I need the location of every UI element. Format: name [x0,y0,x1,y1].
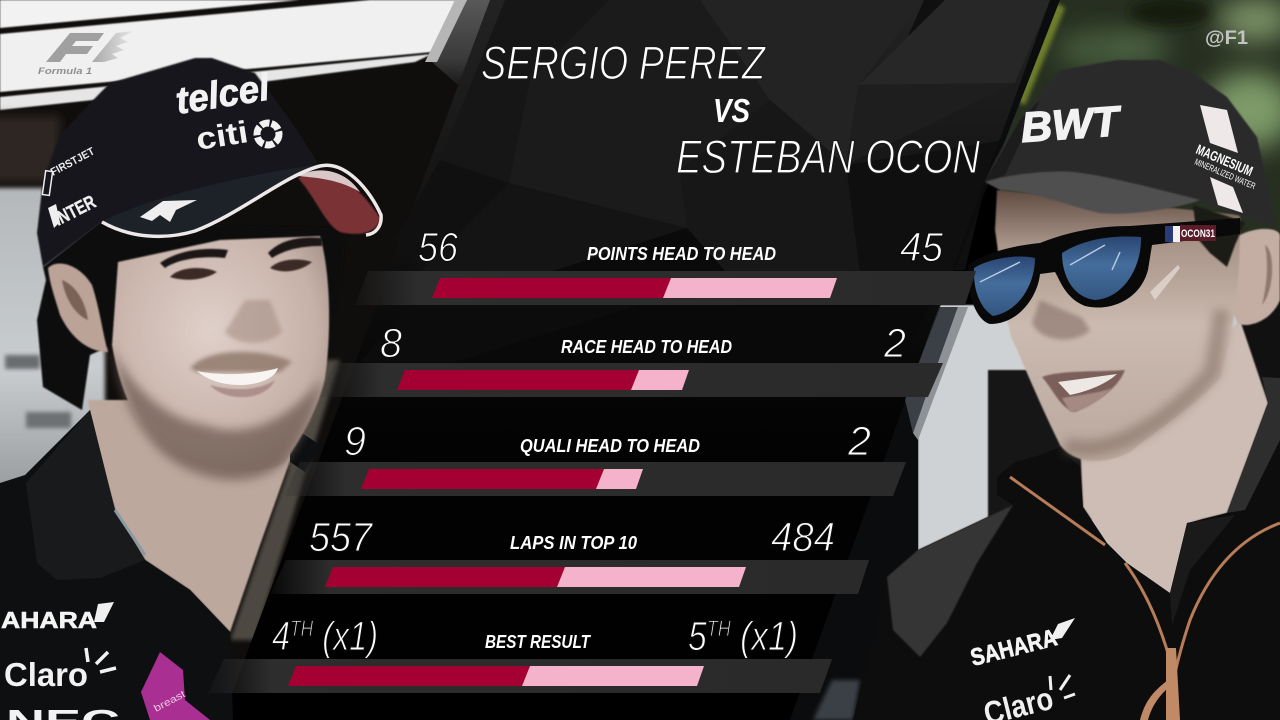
cap brim underside highlight [298,170,360,192]
stat: laps in top 10 [270,514,869,594]
arm flag: OCON31 [1181,228,1215,240]
panel: central dark low-poly parallelogram [222,0,1050,720]
lower translucent wedge [813,680,860,720]
title: Esteban Ocon: ESTEBAN OCON [676,130,980,183]
ribbon text: breast [152,689,188,715]
inner collar [1170,515,1235,625]
sponsor magnesium: MAGNESIUM [1194,141,1255,179]
collar piping [115,510,145,555]
bar perez [361,469,604,489]
icon: claro rays [86,648,116,672]
sponsor sahara wing [1050,618,1075,640]
icon: cap F1 mark [140,200,197,222]
zipper pull [1140,648,1180,720]
neck [1080,320,1268,593]
icon: firstjet box [42,171,53,195]
cap brim [985,171,1200,214]
bar perez [325,567,565,587]
value perez: 8 [380,320,402,366]
track [320,363,943,397]
right photo background [918,0,1280,720]
track [270,560,869,594]
ear [1228,229,1280,325]
label: RACE HEAD TO HEAD [561,337,732,357]
right lens [1062,236,1141,300]
eye right [270,260,312,271]
bar ocon [663,278,837,298]
cap stripe upper [1200,105,1238,153]
cap side shade [985,100,1040,182]
teeth [197,368,278,385]
value ocon: (x1) [731,613,798,659]
sponsor sahara: SAHARA [968,624,1060,672]
value ocon: TH [707,616,731,641]
left photo background [0,0,520,720]
cap crown [37,58,318,267]
value ocon: 45 [900,224,943,270]
bar ocon [557,567,746,587]
cap piping [102,165,381,236]
bar perez [288,666,530,686]
hair [37,222,345,410]
jacket shoulder patch [887,505,1013,657]
stat: race head to head [320,320,943,397]
sunglasses frame [968,218,1240,324]
right panel edge band [905,307,958,433]
value perez: 9 [344,418,366,464]
cheek mark [1150,265,1180,300]
neck [88,400,292,632]
label: BEST RESULT [485,632,592,652]
cap crown [985,60,1275,227]
jersey right shoulder [290,425,320,472]
bar perez [397,370,639,390]
jacket [853,377,1280,720]
title: vs: VS [713,92,750,129]
cap stripe lower [1210,177,1243,213]
title: Sergio Perez: SERGIO PEREZ [481,36,767,89]
track [208,659,832,693]
moustache [190,352,292,372]
pink ribbon badge [141,652,210,720]
lower lip [1062,388,1112,412]
value ocon: 484 [771,514,835,560]
value perez: 56 [418,224,458,270]
ear inner [1262,245,1272,305]
collar texture [1227,377,1280,513]
collar [26,410,145,580]
face [112,236,329,471]
track [355,271,976,305]
sponsor BWT: BWT [1019,97,1124,151]
left lens [974,256,1035,316]
right edge dark region [790,0,1060,720]
zipper left [1010,477,1170,660]
bar perez [432,278,671,298]
icon: inter mark [48,204,60,228]
photo: Esteban Ocon [853,60,1280,720]
sponsor telcel: telcel [173,66,274,123]
value ocon: 2 [883,320,906,366]
eye left [170,268,217,280]
right panel edge highlight [913,307,968,440]
sponsor sahara wing [94,602,114,622]
track [284,462,906,496]
label: QUALI HEAD TO HEAD [520,436,700,456]
photo: Sergio Perez [0,58,381,720]
label: LAPS IN TOP 10 [510,533,637,553]
lens reflections [980,245,1120,282]
stat: quali head to head [284,418,906,496]
zipper right [1172,523,1280,690]
face [995,190,1240,461]
jersey [0,410,233,720]
value perez: (x1) [313,613,378,659]
ear inner [62,280,88,320]
nose shadow [225,300,282,343]
logo text: Formula 1 [38,66,92,76]
credit: @F1: @F1 [1205,28,1248,49]
value perez: 557 [309,514,374,560]
hair side [1193,205,1245,267]
brow left [160,249,228,268]
bar ocon [631,370,689,390]
teeth [1058,374,1117,395]
sponsor citi: citi [194,114,250,157]
sponsor sahara: AHARA [1,607,97,633]
sponsor inter: INTER [51,192,100,230]
F1 logo [38,31,134,76]
value ocon: 5 [688,613,711,659]
bar ocon [596,469,643,489]
value perez: 4 [272,613,295,659]
lower lip [210,380,275,397]
cap brim underside [298,172,380,234]
beard [112,345,322,480]
mouth [1042,370,1125,412]
value ocon: 2 [847,418,871,464]
value perez: TH [290,616,313,641]
brow right [268,238,322,258]
nose shadow [1032,300,1090,340]
arm flag [1165,225,1216,242]
cap brim top [102,164,322,235]
icon: citi wheel [257,123,279,145]
label: POINTS HEAD TO HEAD [587,244,776,264]
bar ocon [522,666,704,686]
sponsor claro: Claro [4,656,88,693]
jaw stubble [1065,310,1222,448]
icon: claro rays [1050,675,1075,698]
sponsor firstjet: FIRSTJET [49,145,97,179]
stat: points head to head [355,224,976,305]
stat: best result [208,613,832,693]
ear [48,263,108,352]
